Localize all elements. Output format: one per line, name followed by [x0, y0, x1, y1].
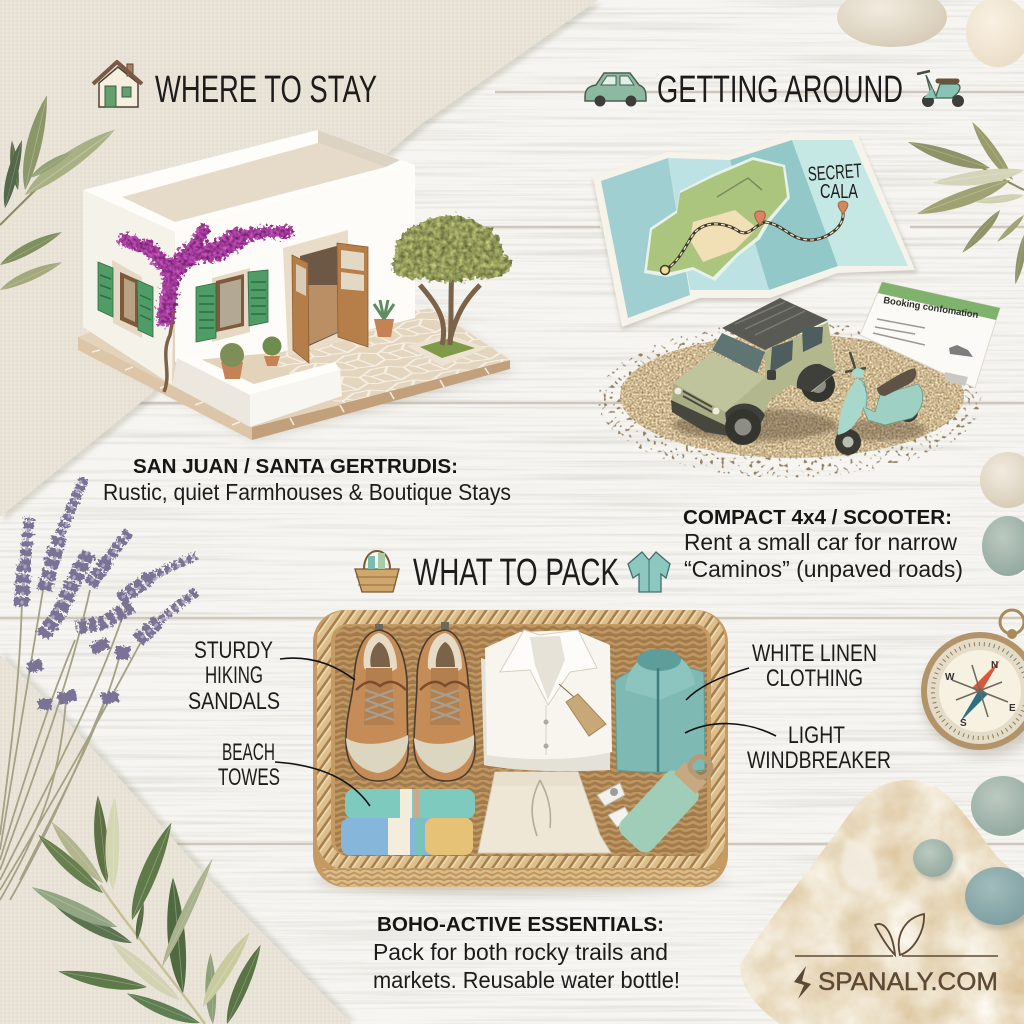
booking confirmation card: Booking confomation	[883, 295, 979, 321]
compass	[921, 610, 1024, 756]
jeep body side	[725, 322, 836, 418]
callout: sturdy hiking sandals: HIKING	[205, 662, 263, 689]
lavender bunch	[0, 478, 197, 900]
light windbreaker	[615, 649, 705, 772]
house shadow	[90, 315, 515, 440]
low courtyard wall	[172, 354, 342, 427]
text: san juan description: SAN JUAN / SANTA GERTRUDIS:	[133, 456, 458, 478]
text: san juan description: Rustic, quiet Farmhouses & Boutique Stays	[103, 479, 511, 505]
left window with green shutters	[98, 260, 153, 338]
reusable water bottle	[615, 746, 722, 857]
icon: car	[585, 73, 646, 106]
callout: light windbreaker	[685, 722, 891, 774]
icon: house	[93, 62, 142, 107]
pebbles on the slab	[913, 776, 1024, 930]
compass: N	[991, 660, 998, 671]
right wall	[175, 165, 415, 362]
olive sprig: top left	[0, 94, 119, 294]
map: secret cala label: CALA	[820, 181, 858, 203]
text: compact 4x4 description: COMPACT 4x4 / SCOOTER:	[683, 507, 952, 529]
olive sprig: top right	[906, 119, 1024, 285]
callout: white linen clothing: WHITE LINEN	[752, 640, 877, 667]
text: boho-active essentials description: BOHO-ACTIVE ESSENTIALS:	[377, 914, 664, 936]
compass: W	[945, 672, 955, 683]
illustration: compact 4x4	[671, 298, 837, 445]
text: boho-active essentials description: Pack for both rocky trails and	[373, 939, 668, 965]
heading: what to pack: WHAT TO PACK	[413, 552, 619, 594]
text: compact 4x4 description: Rent a small car for narrow	[684, 529, 957, 555]
illustration: folded map	[593, 132, 918, 330]
callout: white linen clothing	[686, 640, 877, 700]
callout: white linen clothing: CLOTHING	[766, 665, 863, 692]
compass: E	[1009, 703, 1016, 714]
logo: spanaly.com: SPANALY.COM	[818, 968, 998, 996]
river stones: top right	[837, 0, 1024, 67]
bougainvillea vine	[122, 226, 290, 392]
logo: spanaly.com	[794, 914, 998, 999]
linen cloth: bottom left	[0, 652, 356, 1024]
callout: sturdy hiking sandals	[188, 637, 355, 715]
hiking sandals	[346, 622, 475, 781]
gravel patch	[598, 322, 982, 478]
stones: right edge	[980, 452, 1024, 576]
text: boho-active essentials description: markets. Reusable water bottle!	[373, 967, 680, 993]
icon: basket	[355, 551, 399, 592]
callout: beach towels: TOWES	[218, 764, 280, 791]
icon: shirt	[628, 552, 670, 592]
rock slab	[740, 780, 1024, 1024]
olive sprig: bottom left	[28, 795, 265, 1024]
callout: sturdy hiking sandals: STURDY	[194, 637, 273, 664]
illustration: whitewashed farmhouse	[78, 130, 515, 440]
door frame and open doors	[283, 230, 368, 363]
woven basket with packed items	[313, 610, 728, 894]
terracotta pots with plants	[220, 300, 394, 379]
linen cloth: top left	[0, 0, 602, 521]
text: compact 4x4 description	[683, 507, 963, 582]
white linen shirt	[481, 630, 612, 771]
linen drawstring shorts	[478, 772, 611, 853]
callout: beach towels	[218, 739, 370, 806]
map: island	[644, 157, 790, 281]
callout: sturdy hiking sandals: SANDALS	[188, 688, 280, 715]
callout: light windbreaker: LIGHT	[788, 722, 845, 749]
map: dashed route	[660, 201, 848, 274]
heading: where to stay: WHERE TO STAY	[155, 69, 377, 111]
jeep hood and front	[673, 353, 765, 412]
booking confirmation card	[860, 282, 1000, 388]
heading: where to stay	[93, 62, 377, 111]
right window with green shutters	[100, 268, 268, 342]
rolled beach towels	[341, 789, 475, 855]
left wall	[83, 190, 175, 385]
text: san juan description	[103, 456, 511, 505]
callout: light windbreaker: WINDBREAKER	[747, 747, 891, 774]
text: boho-active essentials description	[373, 914, 680, 993]
stone base and patio	[78, 300, 510, 440]
callout: beach towels: BEACH	[222, 739, 275, 766]
map: secret cala label: SECRET	[807, 160, 863, 186]
small white accessories	[597, 783, 632, 827]
illustration: mint scooter	[834, 352, 926, 455]
heading: getting around: GETTING AROUND	[657, 69, 903, 111]
compass: S	[960, 718, 967, 729]
map: secret cala label	[807, 160, 863, 203]
roof	[83, 130, 415, 232]
olive tree in planter	[391, 215, 511, 366]
icon: scooter	[917, 71, 964, 107]
text: compact 4x4 description: “Caminos” (unpaved roads)	[684, 556, 963, 582]
